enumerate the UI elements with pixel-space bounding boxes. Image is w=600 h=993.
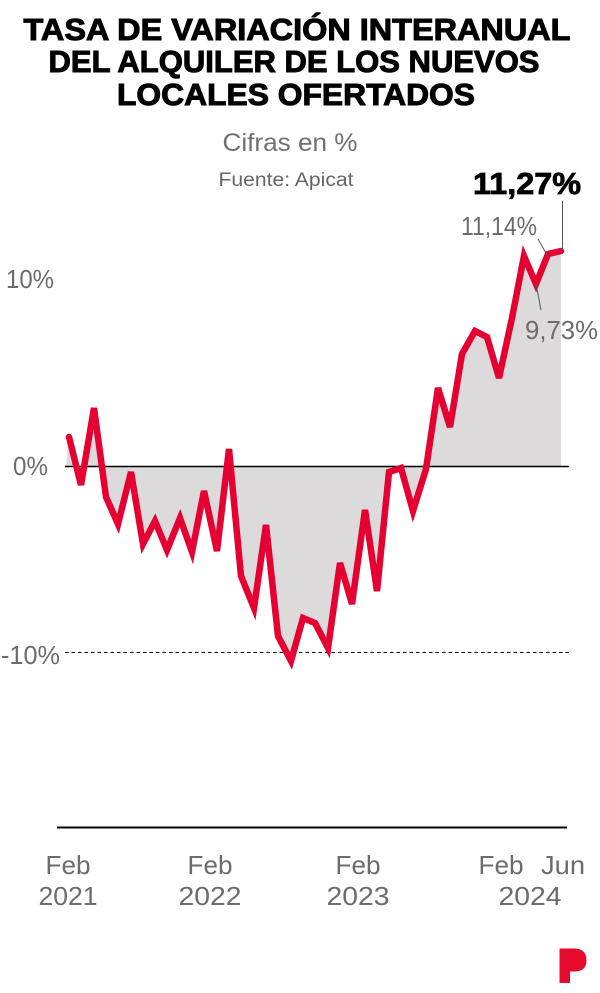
callout: 11,27%: 11,27% bbox=[473, 166, 581, 201]
x axis line bbox=[57, 826, 567, 828]
callout: 11,14%: 11,14% bbox=[461, 211, 537, 241]
callout: 9,73%: 9,73% bbox=[525, 315, 598, 345]
x axis labels: Feb bbox=[188, 850, 232, 880]
y axis labels bbox=[1, 264, 60, 670]
x axis labels: 2022 bbox=[178, 881, 242, 911]
zero line bbox=[65, 466, 569, 468]
y axis labels: 0% bbox=[13, 451, 48, 481]
x axis labels: Jun bbox=[541, 850, 585, 880]
callout: 11,27% bbox=[473, 166, 581, 250]
y axis labels: -10% bbox=[1, 640, 60, 670]
x axis labels: Feb bbox=[46, 850, 90, 880]
y axis labels: 10% bbox=[6, 264, 54, 294]
line chart bbox=[69, 251, 561, 661]
gridline: -10% bbox=[65, 652, 570, 654]
title: TASA DE VARIACIÓN INTERANUAL bbox=[24, 11, 570, 47]
x axis labels: 2023 bbox=[326, 881, 390, 911]
subtitle: Cifras en % bbox=[222, 129, 358, 157]
area under line bbox=[66, 251, 561, 661]
callout: 9,73% bbox=[525, 284, 598, 345]
callout: 11,14% bbox=[461, 211, 547, 255]
x axis labels: Feb bbox=[336, 850, 380, 880]
title bbox=[24, 11, 570, 112]
title: LOCALES OFERTADOS bbox=[117, 77, 475, 112]
x axis labels: Feb bbox=[478, 850, 524, 880]
source: Fuente: Apicat bbox=[218, 170, 354, 191]
x axis labels: 2021 bbox=[38, 881, 98, 911]
x axis labels bbox=[38, 850, 585, 911]
x axis labels: 2024 bbox=[498, 881, 562, 911]
icon: logo P bbox=[560, 948, 586, 983]
title: DEL ALQUILER DE LOS NUEVOS bbox=[48, 44, 540, 79]
